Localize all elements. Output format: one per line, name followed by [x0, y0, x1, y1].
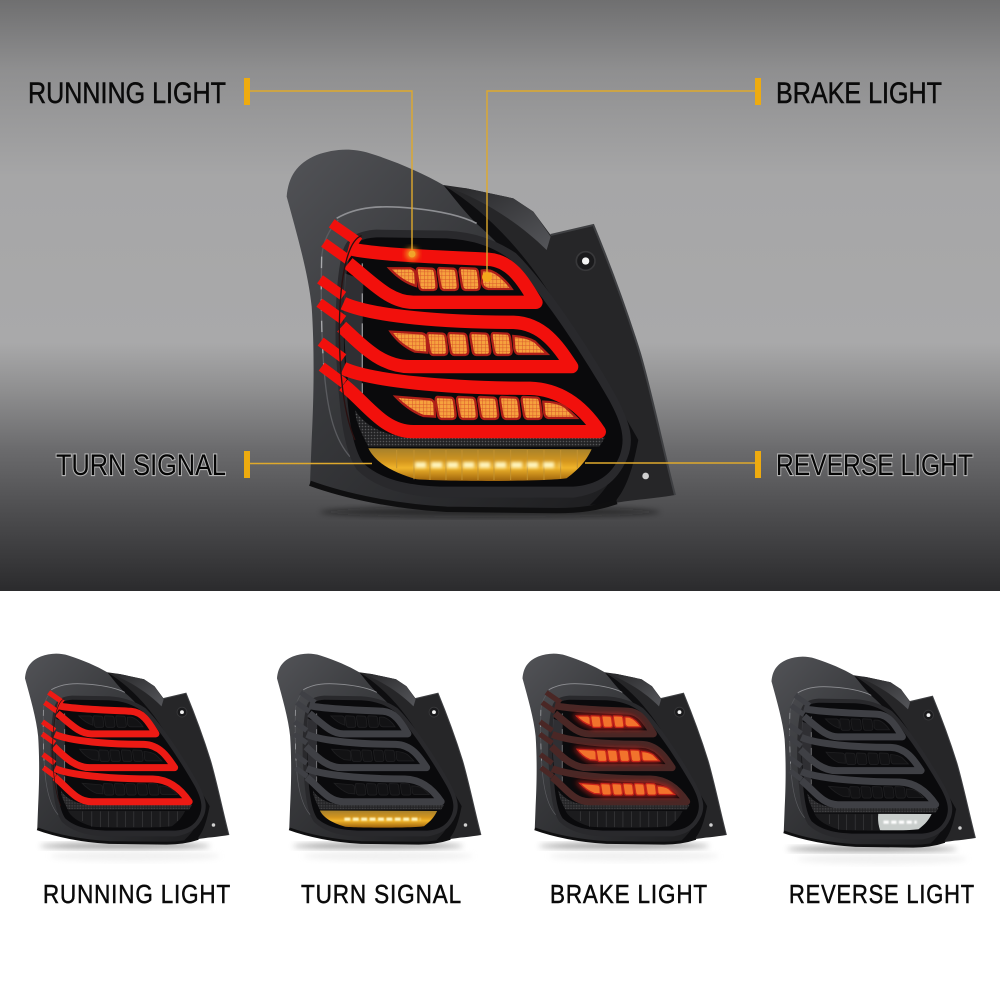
floor shadow [320, 507, 660, 517]
lamp: reverse light state [772, 657, 975, 846]
lamp: brake light state [522, 654, 726, 843]
callout: turn signal [56, 449, 372, 482]
bottom white panel [0, 591, 1000, 1000]
callout: brake light [482, 77, 942, 282]
caption: running light: RUNNING LIGHT [43, 879, 231, 909]
callout: turn signal: TURN SIGNAL [56, 449, 226, 482]
lamp: running light state [25, 654, 229, 843]
caption: brake light: BRAKE LIGHT [550, 879, 708, 909]
callout: reverse light [585, 449, 973, 482]
caption: turn signal: TURN SIGNAL [301, 879, 462, 909]
callout: brake light: BRAKE LIGHT [776, 77, 942, 110]
lamp: turn signal state [277, 654, 481, 843]
main tail light [287, 150, 675, 517]
top background panel [0, 0, 1000, 591]
callout: running light: RUNNING LIGHT [28, 77, 226, 110]
lit lamp body [287, 150, 675, 511]
floor shadows and reflections [40, 843, 967, 864]
callout: running light [28, 77, 418, 260]
